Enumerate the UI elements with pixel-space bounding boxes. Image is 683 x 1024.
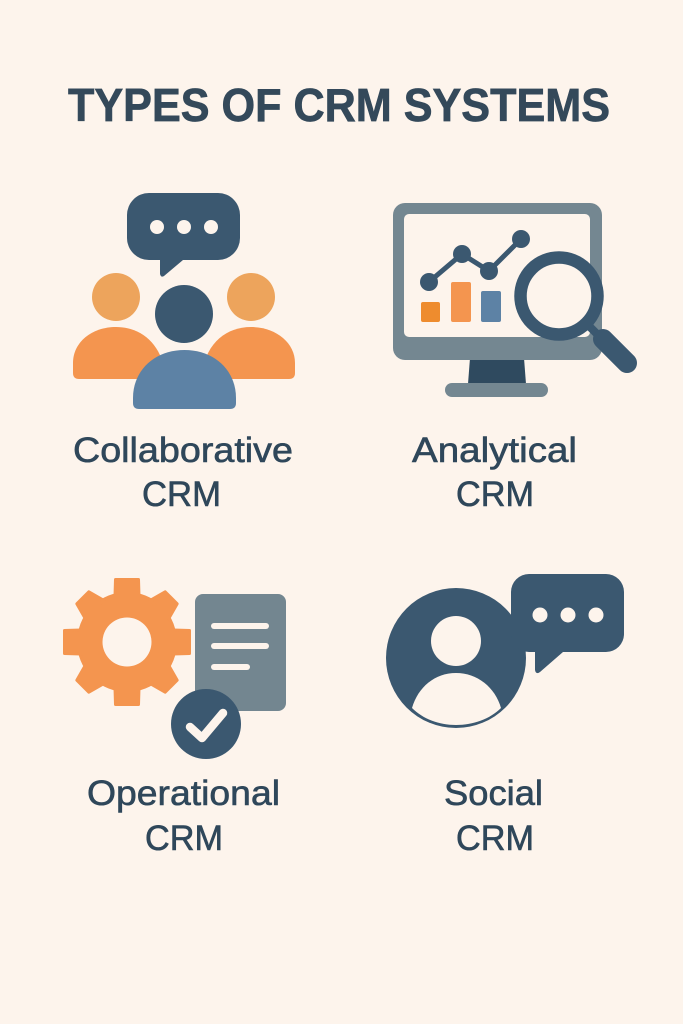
label: Analytical CRM: Analytical (412, 431, 577, 470)
monitor base (445, 383, 548, 397)
bar chart (421, 282, 501, 322)
title: TYPES OF CRM SYSTEMS (68, 79, 610, 131)
line chart (420, 230, 530, 291)
icon: team with speech bubble (73, 193, 295, 409)
label: Operational CRM (87, 774, 280, 858)
center person (133, 285, 236, 409)
panel: operational CRM (64, 580, 286, 858)
label: Social CRM (444, 774, 543, 858)
label: Social CRM: Social (444, 774, 543, 813)
label: Social CRM: CRM (456, 819, 534, 858)
panel: collaborative CRM (73, 193, 295, 514)
panel: analytical CRM (393, 203, 627, 514)
monitor stand (468, 358, 526, 384)
icon: monitor with chart and magnifier (393, 203, 627, 397)
speech bubble (511, 574, 624, 673)
label: Collaborative CRM (73, 431, 293, 514)
magnifier (520, 258, 627, 363)
profile circle (386, 588, 526, 728)
label: Operational CRM: CRM (145, 819, 223, 858)
right person (202, 273, 295, 379)
label: Collaborative CRM: CRM (142, 475, 221, 514)
speech bubble (127, 193, 240, 277)
label: Analytical CRM: CRM (456, 475, 534, 514)
icon: profile with speech bubble (386, 574, 624, 728)
check badge (171, 689, 241, 759)
icon: gear, document and check (64, 580, 286, 759)
left person (73, 273, 165, 379)
panel: social CRM (386, 574, 624, 858)
monitor (393, 203, 602, 360)
gear (64, 580, 190, 704)
label: Analytical CRM (412, 431, 577, 514)
label: Operational CRM: Operational (87, 774, 280, 813)
document (195, 594, 286, 711)
label: Collaborative CRM: Collaborative (73, 431, 293, 470)
